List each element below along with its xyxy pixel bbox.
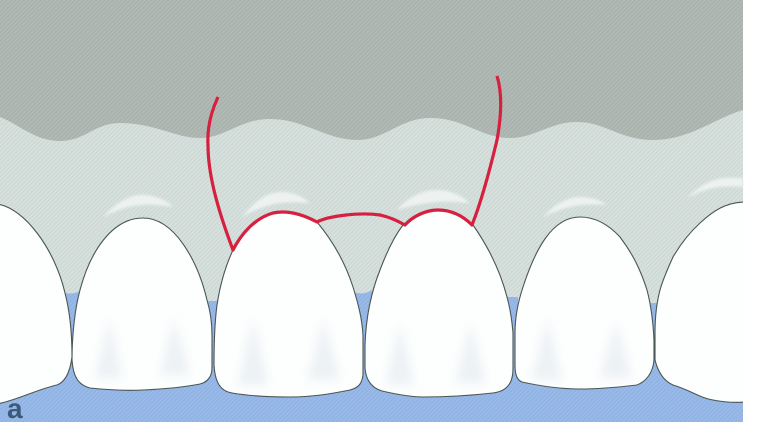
panel: dark upper mucosa — [0, 0, 743, 141]
tooth 4 — [365, 210, 513, 397]
tooth 1 — [0, 204, 72, 404]
icon: gum highlights above teeth — [103, 178, 743, 217]
tooth 5 — [515, 217, 654, 389]
tooth row — [0, 202, 746, 404]
tooth 3 — [214, 212, 363, 397]
label: a: a — [7, 393, 23, 424]
tooth 6 — [655, 202, 746, 402]
tooth 2 — [72, 218, 212, 390]
icon: tooth shading streaks — [95, 318, 632, 385]
panel: blue background below teeth — [0, 290, 743, 422]
red outline of restoration — [208, 76, 501, 250]
